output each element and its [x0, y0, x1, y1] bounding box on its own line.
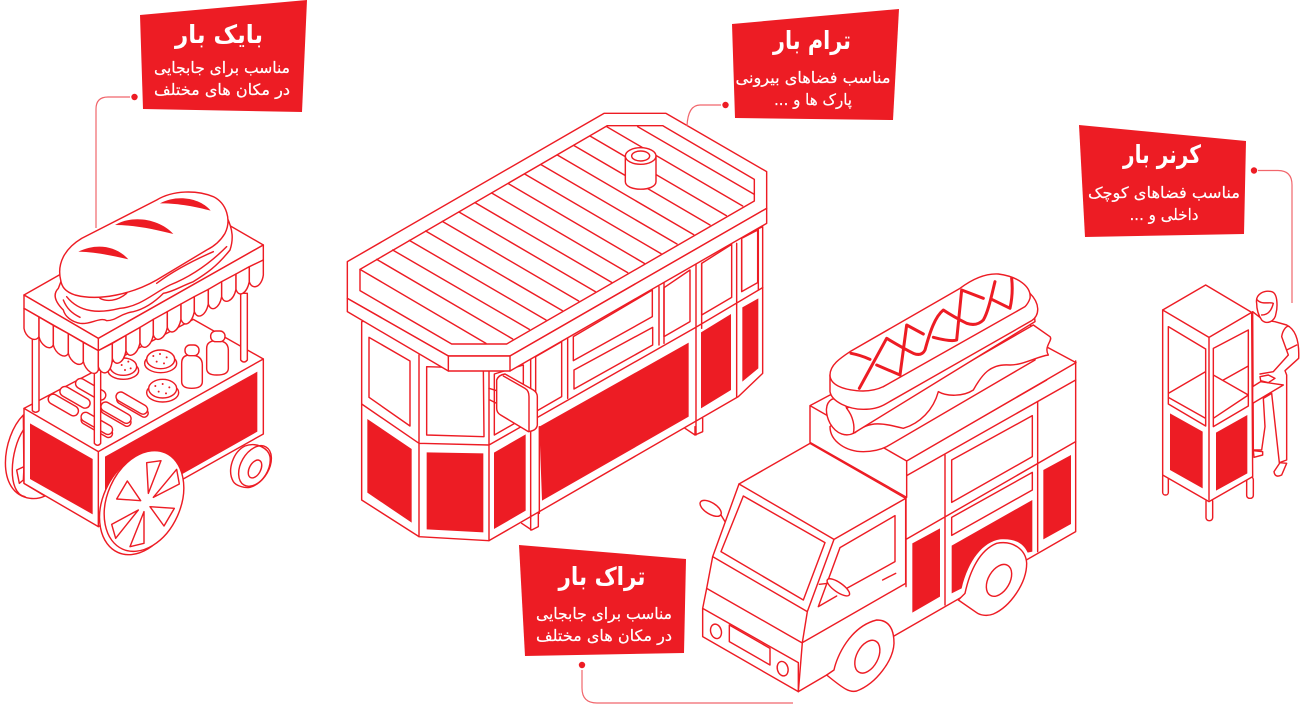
corner bar label: مناسب فضاهای کوچک — [1088, 184, 1240, 202]
bike bar leader line — [96, 94, 138, 228]
truck bar label: تراک بار — [557, 562, 646, 592]
hot dog bun — [830, 293, 1038, 409]
cart rear left wheel — [5, 415, 45, 499]
left mirror — [697, 497, 725, 522]
cart hot dog buns — [46, 377, 150, 439]
truck platform — [810, 346, 1076, 497]
front wheel — [827, 620, 894, 691]
corner bar label: داخلی و ... — [1130, 206, 1199, 225]
cart posts — [32, 293, 247, 445]
bread slits — [78, 198, 211, 259]
tram bar label — [732, 9, 899, 120]
hot dog on truck — [826, 274, 1051, 452]
roof chimney — [625, 148, 656, 189]
cart bottles — [182, 331, 228, 388]
truck bar label — [519, 545, 686, 656]
callout: truck bar — [519, 545, 793, 703]
bike cart illustration — [5, 192, 278, 567]
tram hanging sign — [489, 388, 497, 403]
corner kiosk illustration — [1163, 285, 1299, 521]
food truck illustration — [697, 274, 1076, 692]
cart awning — [24, 202, 263, 373]
truck bar label: در مکان های مختلف — [536, 627, 672, 645]
truck cab — [697, 443, 906, 692]
bike bar label: بایک بار — [173, 20, 263, 49]
headlights and grille — [709, 623, 790, 677]
truck bar label: مناسب برای جابجایی — [536, 605, 672, 623]
truck bar leader line — [579, 662, 793, 703]
tram legs — [522, 418, 703, 530]
callout: tram bar — [687, 9, 899, 126]
cart burgers — [108, 350, 179, 402]
corner bar label: کرنر بار — [1121, 140, 1201, 170]
person shoes — [1274, 463, 1287, 476]
mustard zigzag — [851, 278, 1012, 388]
bike bar label: در مکان های مختلف — [154, 81, 290, 99]
truck body — [894, 361, 1076, 636]
rear wheel — [958, 543, 1027, 615]
tram windows — [369, 230, 758, 437]
roof slats — [360, 127, 754, 343]
tram bar label: پارک ها و ... — [774, 91, 852, 110]
windshield — [721, 496, 825, 600]
callout: corner bar — [1079, 125, 1292, 303]
cart body — [24, 319, 263, 527]
tram roof — [347, 113, 767, 371]
bike bar label: مناسب برای جابجایی — [154, 59, 290, 77]
sandwich on cart — [55, 192, 232, 324]
sandwich bread — [60, 192, 228, 297]
tram kiosk illustration — [347, 113, 767, 541]
tram bar leader line — [687, 102, 729, 126]
tram bar label: مناسب فضاهای بیرونی — [736, 69, 890, 88]
bike bar label — [140, 0, 307, 112]
side window — [818, 516, 896, 607]
door mirror — [819, 576, 852, 599]
tram bar label: ترام بار — [771, 26, 851, 56]
cart small wheel — [231, 440, 278, 492]
kiosk cabinet — [1163, 285, 1253, 521]
tram red panels — [367, 298, 758, 532]
person hand and tray — [1253, 382, 1283, 403]
cart big wheel — [84, 438, 199, 567]
person head — [1256, 291, 1277, 322]
kiosk red panels — [1170, 413, 1247, 491]
truck red panels — [912, 455, 1071, 613]
tram body — [362, 227, 763, 541]
person — [1253, 291, 1299, 476]
callout: bike bar — [96, 0, 307, 228]
corner bar label — [1079, 125, 1246, 237]
corner bar leader line — [1251, 167, 1292, 303]
